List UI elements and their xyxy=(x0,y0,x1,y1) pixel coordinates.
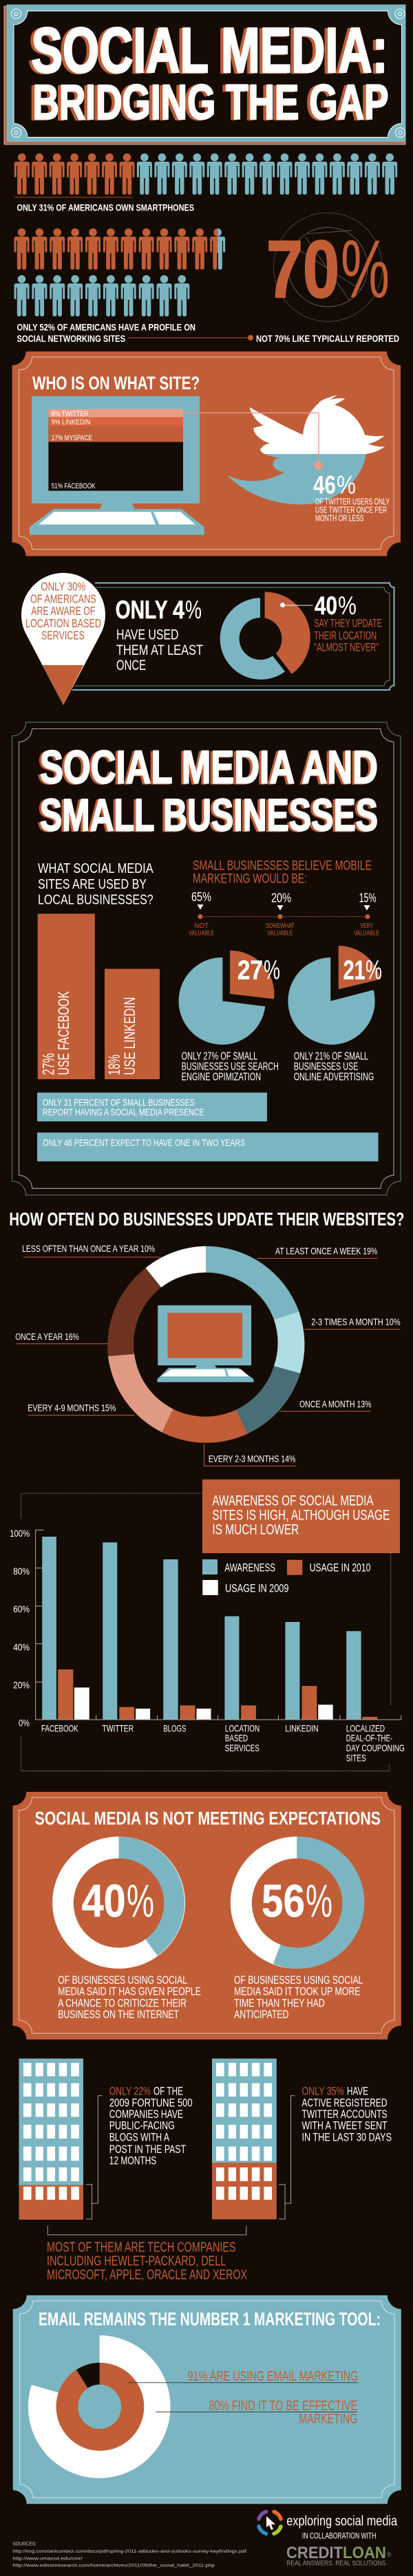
panel: who is on what site xyxy=(12,351,401,556)
donut chart: 40% xyxy=(52,1837,185,1969)
captions: pie charts: ONLY 27% OF SMALL xyxy=(182,1050,257,1062)
ring chart: email usage xyxy=(28,2335,171,2478)
icon: twitter bird xyxy=(226,395,385,504)
icon: map pin: SERVICES xyxy=(41,629,85,642)
labels: update frequency: EVERY 2-3 MONTHS 14% xyxy=(209,1453,295,1464)
heading: WHO IS ON WHAT SITE? xyxy=(32,373,200,393)
logo: creditloan: CREDIT xyxy=(286,2544,343,2562)
stat: only 4%: 4 xyxy=(173,596,184,624)
scale: mobile marketing value: NOT xyxy=(194,922,209,930)
panel: location based services xyxy=(21,573,394,705)
stat: 40%: "ALMOST NEVER" xyxy=(314,641,379,654)
text: fortune 500 blogs: PUBLIC-FACING xyxy=(109,2120,175,2132)
category labels: FACEBOOK xyxy=(41,1723,78,1734)
sources: http://www.umassd.edu/cmr/ xyxy=(12,2556,83,2561)
logo: creditloan: REAL ANSWERS. REAL SOLUTIONS. xyxy=(286,2560,387,2568)
caption: social profile: ONLY 52% OF AMERICANS HAVE A PROFILE ON xyxy=(17,322,195,333)
donut chart: 40% almost never xyxy=(220,592,313,680)
pie charts: 27% and 21% xyxy=(179,946,382,1045)
text: tech companies: MOST OF THEM ARE TECH COMPANIES xyxy=(47,2240,235,2255)
scale: mobile marketing value: 65% xyxy=(191,890,211,904)
sources: SOURCES: xyxy=(12,2542,36,2547)
legend xyxy=(202,1559,370,1595)
legend: USAGE IN 2009 xyxy=(225,1582,288,1595)
stat: 40%: 40 xyxy=(315,592,337,620)
logo: creditloan: ® xyxy=(387,2551,392,2558)
subheading: mobile marketing xyxy=(193,858,372,887)
text: twitter accounts xyxy=(301,2086,392,2143)
text: fortune 500 blogs xyxy=(109,2086,193,2167)
bar chart: facebook and linkedin use: USE LINKEDIN xyxy=(121,997,138,1075)
callout: awareness xyxy=(202,1480,400,1553)
scale: mobile marketing value: 20% xyxy=(271,891,291,905)
connector: twitter share to bird xyxy=(183,413,323,470)
caption: social profile: SOCIAL NETWORKING SITES xyxy=(17,333,125,344)
pie charts: 27% and 21%: % xyxy=(264,955,280,985)
donut chart: update frequency xyxy=(16,1246,401,1443)
caption: 40%: BUSINESS ON THE INTERNET xyxy=(58,2009,179,2021)
callout: awareness: IS MUCH LOWER xyxy=(212,1522,299,1538)
text: fortune 500 blogs: POST IN THE PAST xyxy=(109,2143,186,2156)
bars xyxy=(36,1530,401,1720)
text: tech companies: MICROSOFT, APPLE, ORACLE AND XEROX xyxy=(47,2267,247,2282)
axis labels: 40% xyxy=(13,1641,30,1652)
stat: only 4% xyxy=(116,596,203,673)
captions: pie charts: ONLY 21% OF SMALL xyxy=(294,1050,368,1062)
text: twitter accounts: WITH A TWEET SENT xyxy=(301,2120,387,2132)
stat: only 4%: ONLY xyxy=(116,596,168,624)
panel: email marketing xyxy=(13,2295,401,2504)
big stat: 70% xyxy=(266,213,390,321)
icon: map pin: ONLY 30% xyxy=(41,580,85,594)
icon: map pin: LOCATION BASED xyxy=(25,616,101,630)
label: 80%: MARKETING xyxy=(299,2412,357,2427)
stat: 40%: THEIR LOCATION xyxy=(314,629,377,642)
stat: only 4%: ONCE xyxy=(116,658,146,673)
caption: 40%: OF BUSINESSES USING SOCIAL xyxy=(58,1974,187,1987)
caption: 56%: MEDIA SAID IT TOOK UP MORE xyxy=(234,1986,361,1998)
text: fortune 500 blogs: OF THE xyxy=(153,2086,183,2098)
caption: social profile xyxy=(17,322,195,344)
bar: 46 percent expect xyxy=(37,1132,379,1161)
scale: mobile marketing value: VERY xyxy=(360,922,373,930)
bar: 31 percent presence: REPORT HAVING A SOCIAL MEDIA PRESENCE xyxy=(43,1107,204,1118)
stat: only 4%: % xyxy=(185,596,202,624)
icon: map pin xyxy=(21,573,105,705)
subheading: local businesses: LOCAL BUSINESSES? xyxy=(38,892,153,907)
labels: update frequency xyxy=(15,1243,401,1466)
donut chart: 56% xyxy=(231,1837,364,1969)
logo: exploring social media xyxy=(259,2512,398,2534)
text: tech companies xyxy=(47,2240,247,2282)
axis labels xyxy=(10,1528,30,1728)
text: fortune 500 blogs: BLOGS WITH A xyxy=(109,2131,169,2143)
category labels: DEAL-OF-THE- xyxy=(346,1733,392,1744)
icon: computer with site shares: 51% FACEBOOK xyxy=(52,482,96,490)
caption: 40% xyxy=(58,1974,201,2021)
big stat: 70%: 70 xyxy=(266,224,339,315)
icon: computer with site shares xyxy=(30,396,204,535)
labels: update frequency: AT LEAST ONCE A WEEK 19% xyxy=(275,1245,377,1256)
labels: update frequency: ONCE A YEAR 16% xyxy=(15,1331,79,1342)
text: twitter accounts: ONLY 35% xyxy=(301,2086,344,2098)
bar: 46 percent expect: ONLY 46 PERCENT EXPECT TO HAVE ONE IN TWO YEARS xyxy=(43,1137,245,1148)
captions: pie charts: BUSINESSES USE xyxy=(294,1061,358,1073)
bar: 31 percent presence xyxy=(37,1092,267,1121)
scale: mobile marketing value: VALUABLE xyxy=(354,930,379,937)
category labels: SITES xyxy=(346,1752,366,1763)
category labels xyxy=(41,1723,405,1763)
axis labels: 20% xyxy=(13,1679,30,1690)
stat: 40% xyxy=(314,592,382,654)
caption: smartphones: ONLY 31% OF AMERICANS OWN SMARTPHONES xyxy=(17,202,194,213)
donut chart: 40%: % xyxy=(127,1876,154,1927)
axis labels: 100% xyxy=(10,1528,30,1539)
caption: 40%: MEDIA SAID IT HAS GIVEN PEOPLE xyxy=(58,1986,201,1998)
category labels: SERVICES xyxy=(225,1742,260,1753)
category labels: BASED xyxy=(225,1733,248,1744)
text: fortune 500 blogs: 12 MONTHS xyxy=(109,2154,156,2167)
axis labels: 60% xyxy=(13,1603,30,1614)
legend: USAGE IN 2010 xyxy=(310,1561,370,1574)
subheading: mobile marketing: MARKETING WOULD BE: xyxy=(193,872,307,887)
category labels: LOCATION xyxy=(225,1723,260,1734)
label: 80% xyxy=(156,2399,357,2427)
scale: mobile marketing value xyxy=(189,890,379,937)
scale: mobile marketing value: VALUABLE xyxy=(189,930,214,937)
logo: creditloan: LOAN xyxy=(343,2544,386,2562)
subheading: local businesses: WHAT SOCIAL MEDIA xyxy=(38,861,153,876)
icon: building 35% xyxy=(212,2059,277,2219)
people row: smartphones 31% xyxy=(14,153,397,197)
logo: creditloan xyxy=(286,2544,392,2568)
donut chart: 40%: 40 xyxy=(82,1876,126,1927)
text: tech companies: INCLUDING HEWLET-PACKARD, DELL xyxy=(47,2253,226,2269)
big stat: 70%: % xyxy=(341,224,390,316)
bar chart: facebook and linkedin use: 27% xyxy=(40,1053,58,1075)
text: fortune 500 blogs: ONLY 22% xyxy=(109,2086,151,2098)
category labels: BLOGS xyxy=(163,1723,186,1734)
captions: pie charts xyxy=(182,1050,374,1083)
text: twitter accounts: HAVE xyxy=(347,2086,368,2098)
icon: computer xyxy=(157,1306,253,1382)
pie charts: 27% and 21%: 27 xyxy=(237,955,263,985)
icon: map pin: ARE AWARE OF xyxy=(31,604,96,618)
heading xyxy=(38,741,378,841)
donut chart: 56%: 56 xyxy=(262,1876,305,1927)
labels: update frequency: EVERY 4-9 MONTHS 15% xyxy=(28,1403,116,1414)
title banner xyxy=(4,4,406,144)
scale: mobile marketing value: SOMEWHAT xyxy=(266,922,295,930)
captions: pie charts: ONLINE ADVERTISING xyxy=(294,1072,374,1083)
pie charts: 27% and 21%: % xyxy=(366,955,382,985)
caption: 56%: OF BUSINESSES USING SOCIAL xyxy=(234,1974,363,1987)
text: fortune 500 blogs: 2009 FORTUNE 500 xyxy=(109,2097,193,2109)
text: fortune 500 blogs: COMPANIES HAVE xyxy=(109,2108,183,2121)
people rows: social network profile 52% xyxy=(14,228,225,316)
captions: pie charts: ENGINE OPIMIZATION xyxy=(182,1072,261,1083)
caption: 56% xyxy=(234,1974,363,2021)
axis labels: 80% xyxy=(13,1566,30,1577)
sources: http://www.edisonresearch.com/home/archives/2011/05/the_social_habit_2011.php xyxy=(12,2564,215,2568)
scale: mobile marketing value: VALUABLE xyxy=(267,930,293,937)
captions: pie charts: BUSINESSES USE SEARCH xyxy=(182,1061,279,1073)
bar chart: facebook and linkedin use: 18% xyxy=(105,1054,124,1075)
axis labels: 0% xyxy=(19,1717,30,1728)
bar chart: awareness versus usage xyxy=(10,1493,405,1771)
category labels: TWITTER xyxy=(102,1723,134,1734)
category labels: LOCALIZED xyxy=(346,1723,385,1734)
caption: 40%: A CHANCE TO CRITICIZE THEIR xyxy=(58,1997,187,2009)
icon: map pin: OF AMERICANS xyxy=(30,592,96,606)
labels: update frequency: ONCE A MONTH 13% xyxy=(299,1398,372,1409)
stat: 46%: MONTH OR LESS xyxy=(315,513,363,523)
icon: computer with site shares: 9% LINKEDIN xyxy=(52,418,90,426)
brackets: buildings xyxy=(47,2096,295,2235)
category labels: LINKEDIN xyxy=(285,1723,319,1734)
stat: 40%: % xyxy=(338,592,357,620)
pie charts: 27% and 21%: 21 xyxy=(343,955,366,985)
stat: only 4%: THEM AT LEAST xyxy=(116,642,203,658)
icon: computer with site shares: 8% TWITTER xyxy=(52,410,89,418)
sources xyxy=(12,2542,246,2568)
scale: mobile marketing value: 15% xyxy=(359,891,377,905)
subheading: local businesses xyxy=(38,861,153,907)
dotted chart frame xyxy=(21,1493,391,1771)
bar chart: facebook and linkedin use: USE FACEBOOK xyxy=(55,991,72,1075)
panel: social media is not meeting expectations xyxy=(12,1792,401,2039)
legend: AWARENESS xyxy=(224,1561,275,1574)
subheading: local businesses: SITES ARE USED BY xyxy=(38,877,147,892)
stat: only 4%: HAVE USED xyxy=(116,627,179,642)
bar: 31 percent presence: ONLY 31 PERCENT OF SMALL BUSINESSES xyxy=(43,1096,195,1107)
labels: update frequency: LESS OFTEN THAN ONCE A YEAR 10% xyxy=(22,1243,155,1254)
donut chart: 56%: % xyxy=(306,1876,332,1927)
bar chart: facebook and linkedin use xyxy=(38,913,160,1079)
label: 80%: 80% FIND IT TO BE EFFECTIVE xyxy=(209,2399,357,2414)
caption: 56%: TIME THAN THEY HAD xyxy=(234,1997,325,2009)
caption: 56%: ANTICIPATED xyxy=(234,2009,288,2021)
stat: 46% xyxy=(313,470,390,523)
callout: not 70% xyxy=(128,333,399,344)
text: in collaboration with: IN COLLABORATION WITH xyxy=(302,2531,376,2540)
stat: 46%: 46 xyxy=(313,470,336,499)
panel: social media and small businesses xyxy=(12,722,401,1195)
sources: http://img.constantcontact.com/docs/pdf/spring-2011-attitudes-and-outlooks-survey-keyfindings.pdf xyxy=(12,2549,246,2554)
icon: computer with site shares: 17% MYSPACE xyxy=(52,434,92,442)
stat: 46%: % xyxy=(337,470,356,499)
icon: building 22% xyxy=(19,2059,83,2220)
